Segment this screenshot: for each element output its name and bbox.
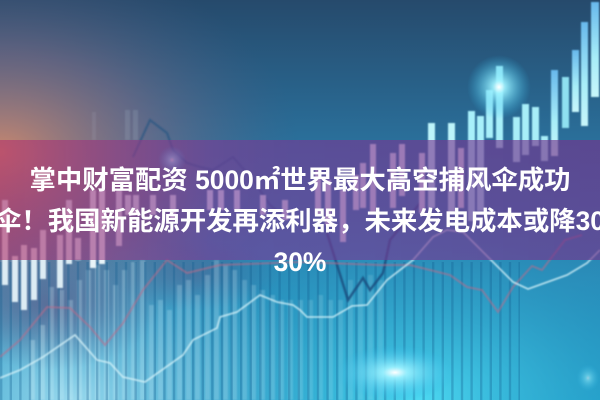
dark stripe gaps — [0, 262, 520, 400]
red trend line — [0, 235, 582, 357]
glow points — [158, 55, 600, 400]
headline last line: 30% — [274, 247, 326, 277]
white trend line — [0, 230, 600, 382]
candlestick bars — [2, 2, 599, 310]
background faded volume stripes — [30, 110, 383, 400]
dark trend line — [133, 120, 423, 300]
headline text: 掌中财富配资 5000㎡世界最大高空捕风伞成功 — [29, 165, 571, 195]
purple banner band — [0, 140, 600, 260]
headline text: 伞！我国新能源开发再添利器，未来发电成本或降30 — [0, 206, 600, 236]
headline text — [0, 165, 600, 236]
